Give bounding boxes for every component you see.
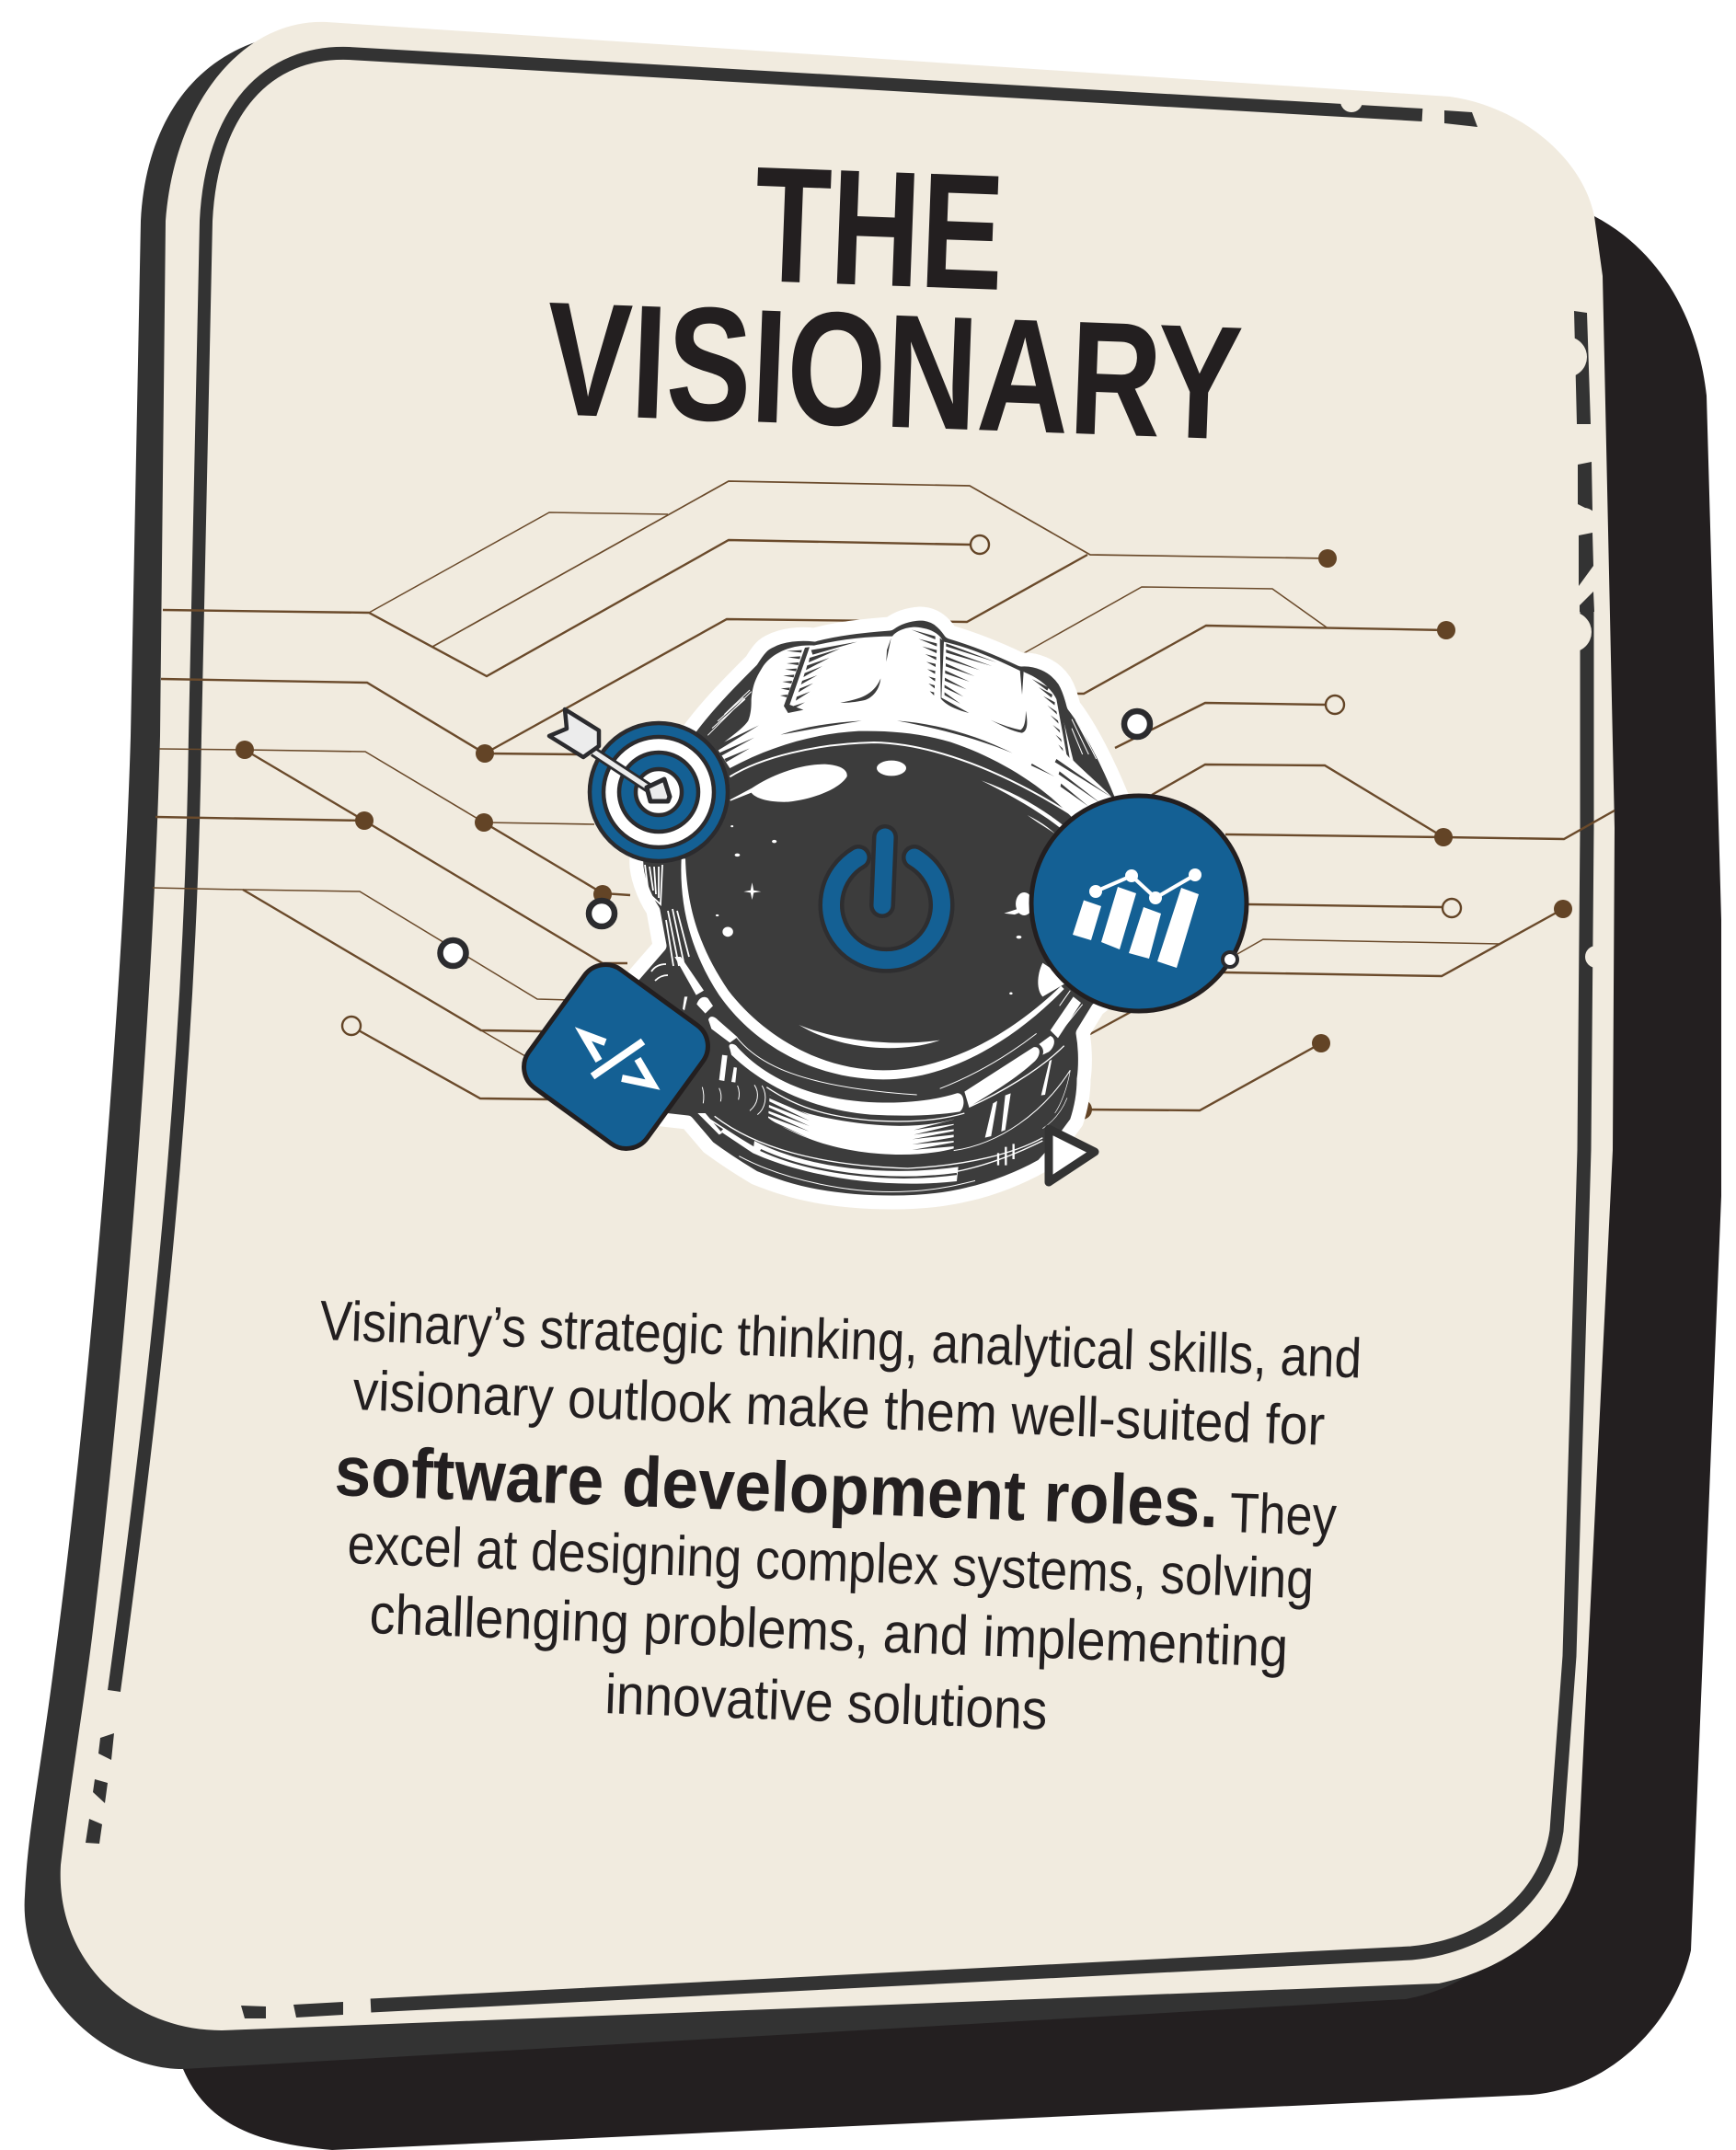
- body text: [319, 1289, 1362, 1742]
- helmet top: dome and visor highlights: [707, 627, 1113, 834]
- helmet side fold and stars: [716, 825, 1036, 995]
- arrow shaft: [593, 752, 655, 792]
- astronaut helmet illustration: [629, 614, 1159, 1202]
- icon: target with arrow: [549, 709, 728, 861]
- body text: visionary outlook make them well-suited for: [352, 1359, 1326, 1457]
- collar band: [768, 1095, 954, 1155]
- visor reflections: [730, 761, 1063, 834]
- arrow head: [647, 779, 670, 801]
- body text: excel at designing complex systems, solving: [347, 1512, 1315, 1611]
- title: VISIONARY: [544, 269, 1245, 475]
- helmet bottom: neck rings and collar: [674, 858, 1083, 1191]
- body text: They: [1229, 1481, 1338, 1547]
- big white visor ring: [681, 858, 1064, 1079]
- icon: growth chart badge: [1031, 796, 1247, 1011]
- icon: code badge: [513, 954, 719, 1159]
- chart trend line: [1096, 875, 1195, 898]
- lower collar bands: [697, 1113, 959, 1184]
- visor top rim: [730, 742, 1074, 816]
- circuit lines: [153, 481, 1615, 1110]
- inner dark collar line: [761, 1150, 957, 1178]
- arrow shaft outline: [593, 752, 655, 792]
- dome dark hatching: [707, 629, 1111, 807]
- arrow fletching: [549, 709, 599, 757]
- neck ring segments: [674, 957, 1081, 1138]
- helmet silhouette with white halo: [629, 614, 1159, 1202]
- chart bars: [1073, 887, 1199, 968]
- bottom visor reflection: [799, 1025, 940, 1048]
- white hatch on dark rim: [707, 690, 1097, 759]
- side fold hatch: [645, 865, 689, 981]
- icon: power symbol: [832, 837, 942, 960]
- body text: challenging problems, and implementing: [369, 1582, 1289, 1679]
- bold highlight: software development roles.: [333, 1431, 1220, 1543]
- hose creases: [702, 1085, 765, 1115]
- code glyph: [583, 1034, 653, 1085]
- collar hatching: [768, 1094, 954, 1150]
- small badge ring: [1223, 952, 1237, 967]
- thin ring lines: [702, 991, 1083, 1171]
- body text: innovative solutions: [604, 1662, 1049, 1742]
- icon: play triangle: [1049, 1129, 1095, 1182]
- dome white shell: [717, 627, 1113, 819]
- title: [544, 132, 1245, 475]
- lower right visor reflection: [1038, 963, 1064, 996]
- title: THE: [752, 132, 1007, 325]
- body text: Visinary’s strategic thinking, analytical skills, and: [319, 1289, 1362, 1390]
- chart trend points: [1089, 868, 1201, 904]
- dark ring nodes: [440, 711, 1150, 966]
- circuit nodes: [236, 535, 1572, 1120]
- outer white collar line: [739, 1156, 975, 1191]
